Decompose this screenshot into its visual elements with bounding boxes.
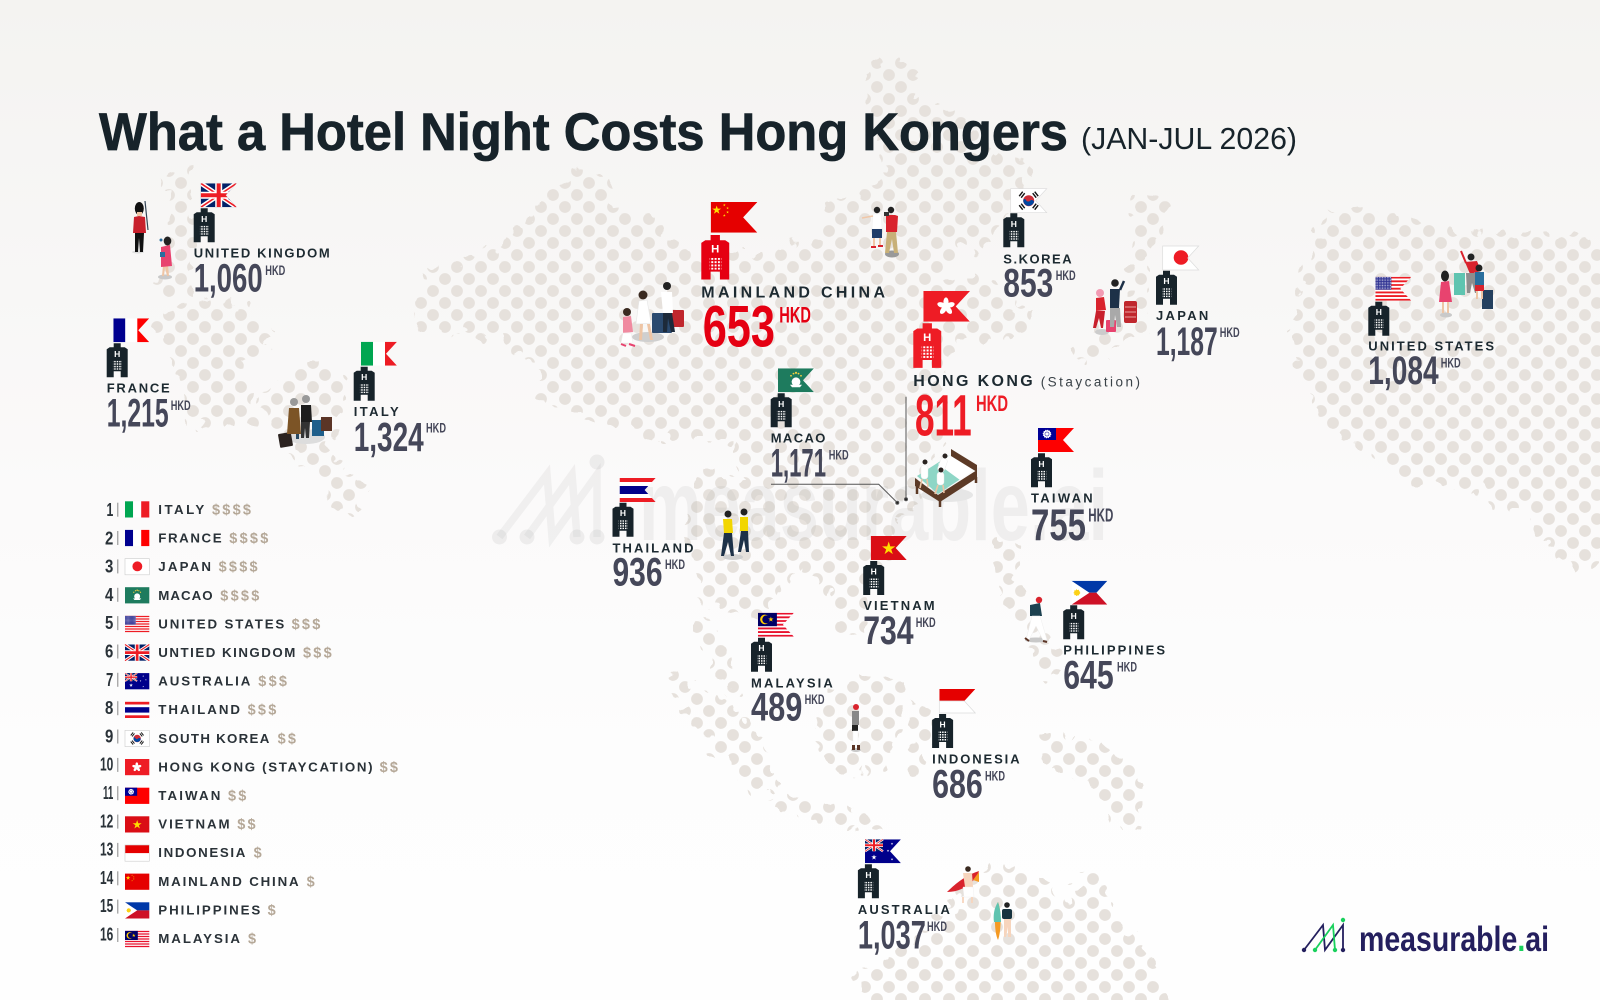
country: Malaysia [751, 613, 833, 730]
rank row 16: $ [248, 932, 256, 948]
illustration: bed with guests [915, 449, 977, 507]
flag: South Korea [1011, 189, 1047, 213]
rank row 2: 2 [105, 528, 113, 548]
rank row 4 [105, 585, 259, 605]
rank row 10: 10 [100, 755, 113, 775]
illustration: elderly couple with luggage [278, 395, 332, 448]
rank row 5: 5 [105, 613, 113, 633]
country: United States [1368, 277, 1494, 393]
unit: HKD [1056, 267, 1076, 283]
rank row 5: UNITED STATES [158, 616, 284, 631]
rank row 13 [100, 840, 262, 862]
logo wordmark: measurable.ai [1359, 920, 1549, 959]
icon: hotel: H [865, 870, 871, 880]
flag: Thailand [620, 478, 656, 502]
country: Thailand [612, 478, 694, 595]
unit: HKD [985, 768, 1005, 784]
price: 1,060 [194, 257, 263, 301]
rank row 9: 9 [105, 726, 113, 746]
price: 734 [863, 609, 914, 653]
icon: hotel: H [758, 643, 765, 653]
label: AUSTRALIA [858, 902, 951, 917]
leader lines to Macao and Hong Kong [771, 397, 908, 504]
flag: Indonesia [939, 689, 975, 713]
price: 1,037 [858, 913, 926, 957]
rank row 5 [105, 613, 320, 633]
country: Mainland China [701, 202, 885, 360]
country: Taiwan [1031, 428, 1113, 550]
watermark: measurable.ai [639, 450, 1108, 562]
label: S.KOREA [1003, 251, 1072, 266]
label: VIETNAM [863, 598, 935, 613]
flag: Vietnam [871, 536, 907, 560]
unit: HKD [927, 918, 947, 934]
rank row 4: $$$$ [220, 588, 259, 604]
label: FRANCE [107, 380, 170, 396]
unit: HKD [171, 397, 191, 413]
rank row 3 [105, 557, 258, 577]
rank row 3: $$$$ [219, 560, 258, 576]
flag: Philippines [1071, 581, 1107, 605]
subtitle: date range: (JAN-JUL 2026) [1081, 121, 1297, 156]
label: ITALY [354, 404, 399, 419]
country: France [107, 318, 191, 436]
price: 936 [612, 551, 662, 595]
rank row 9: SOUTH KOREA [158, 731, 270, 746]
unit: HKD [779, 302, 811, 327]
price: 1,084 [1368, 349, 1439, 393]
icon: hotel: H [201, 214, 207, 224]
flag: Hong Kong [923, 291, 970, 322]
unit: HKD [976, 391, 1008, 416]
flag: Japan [1163, 246, 1199, 270]
unit: HKD [1088, 506, 1113, 526]
country: Japan [1156, 246, 1240, 364]
rank row 3: 3 [105, 557, 113, 577]
icon: hotel: H [114, 349, 120, 359]
rank row 7: $$$ [258, 674, 287, 690]
unit: HKD [1220, 324, 1240, 340]
rank row 14: $ [307, 874, 315, 890]
rank row 15: $ [268, 903, 276, 919]
label: TAIWAN [1031, 491, 1093, 506]
label: HONG KONG [913, 373, 1033, 390]
flag: Macao [778, 368, 814, 392]
rank row 6: 6 [105, 642, 113, 662]
rank row 7: 7 [106, 670, 113, 690]
unit: HKD [265, 262, 285, 278]
rank row 10 [100, 755, 398, 776]
flag: Taiwan [1038, 428, 1074, 452]
rank row 15 [100, 896, 276, 919]
rank row 4: MACAO [158, 588, 213, 603]
icon: hotel: H [923, 332, 931, 344]
country: Vietnam [863, 536, 936, 653]
rank row 2: $$$$ [229, 531, 268, 547]
illustration: couple with luggage [1093, 279, 1137, 335]
icon: hotel: H [1071, 611, 1077, 621]
rank row 2: FRANCE [158, 531, 222, 546]
icon: hotel [913, 323, 941, 368]
country: Macao [771, 368, 849, 486]
label: THAILAND [612, 540, 694, 555]
icon: hotel: H [940, 720, 946, 730]
icon: hotel: H [871, 566, 877, 576]
price: 1,171 [771, 442, 826, 486]
label: MAINLAND CHINA [701, 284, 885, 301]
icon: hotel: H [620, 508, 626, 518]
icon: hotel: H [1163, 276, 1170, 286]
rank row 12: VIETNAM [158, 817, 230, 832]
label: PHILIPPINES [1063, 642, 1165, 657]
rank row 15: PHILIPPINES [158, 902, 260, 917]
rank row 16: MALAYSIA [158, 931, 240, 946]
rank row 1: ITALY [158, 502, 204, 517]
flag: UK [201, 183, 237, 207]
rank row 9: $$ [278, 731, 296, 747]
flag: Australia [865, 839, 901, 863]
price: 1,187 [1156, 320, 1218, 364]
rank row 9 [105, 726, 296, 747]
rank row 6 [105, 642, 332, 662]
price: 653 [703, 295, 775, 360]
rank row 14: 14 [100, 868, 113, 888]
unit: HKD [426, 420, 446, 436]
price: 853 [1003, 262, 1053, 306]
price: 755 [1031, 501, 1086, 550]
flag: China [711, 202, 757, 233]
rank row 14 [100, 868, 315, 890]
rank row 8: THAILAND [158, 702, 240, 717]
icon: hotel: H [711, 244, 719, 256]
illustration: hiker [1025, 597, 1047, 642]
flag: France [113, 318, 149, 342]
rank row 15: 15 [100, 896, 113, 916]
rank row 12: 12 [100, 811, 113, 831]
illustration: two backpackers [721, 508, 749, 560]
label note: staycation: (Staycation) [1041, 374, 1140, 390]
rank row 11 [103, 783, 246, 804]
country: Indonesia [932, 689, 1020, 806]
flag: United States [1375, 277, 1411, 301]
rank row 7: AUSTRALIA [158, 674, 251, 689]
rank row 8 [105, 698, 276, 719]
rank row 8: 8 [105, 698, 113, 718]
illustration: two men taking a photo [862, 207, 899, 258]
rank row 1: $$$$ [212, 502, 251, 518]
rank row 8: $$$ [248, 703, 276, 719]
price: 645 [1063, 653, 1114, 697]
icon: hotel [701, 235, 729, 280]
rank row 14: MAINLAND CHINA [158, 874, 299, 889]
logo mark [1302, 918, 1345, 952]
rank row 13: 13 [100, 840, 113, 860]
rank row 13: $ [254, 846, 262, 862]
price: 811 [915, 384, 972, 449]
rank row 12: $$ [237, 817, 256, 833]
icon: hotel: H [1011, 219, 1017, 229]
rank row 11: 11 [103, 783, 113, 803]
rank row 16 [100, 924, 256, 948]
unit: HKD [805, 691, 825, 707]
price: 686 [932, 762, 983, 806]
icon: hotel: H [1038, 459, 1045, 469]
rank row 1: 1 [106, 500, 113, 520]
rank row 6: UNTIED KINGDOM [158, 645, 295, 660]
flag: Malaysia [758, 613, 794, 637]
legend: price ranking [100, 500, 398, 948]
label: MACAO [771, 430, 825, 445]
rank row 13: INDONESIA [158, 845, 246, 860]
label: UNITED STATES [1368, 339, 1494, 354]
rank row 16: 16 [100, 924, 113, 944]
illustration: family with suitcases [1439, 251, 1493, 318]
unit: HKD [665, 556, 685, 572]
price: 1,215 [107, 392, 169, 436]
rank row 1 [106, 500, 251, 520]
rank row 3: JAPAN [158, 559, 211, 574]
unit: HKD [916, 614, 936, 630]
rank row 5: $$$ [292, 617, 320, 633]
rank row 2 [105, 528, 268, 548]
rank row 7 [106, 670, 287, 690]
rank row 6: $$$ [303, 646, 332, 662]
flag: Italy [361, 342, 397, 366]
icon: hotel: H [1376, 307, 1382, 317]
country: Philippines [1063, 581, 1165, 697]
country: Australia [858, 839, 951, 957]
rank row 11: TAIWAN [158, 788, 220, 803]
country: Hong Kong [913, 291, 1140, 449]
country: United Kingdom [194, 183, 330, 301]
illustration: solo traveller [851, 704, 861, 752]
icon: hotel: H [778, 399, 784, 409]
label: MALAYSIA [751, 675, 833, 690]
rank row 4: 4 [105, 585, 113, 605]
price: 489 [751, 686, 802, 730]
rank row 12 [100, 811, 256, 833]
unit: HKD [829, 446, 849, 462]
logo: measurable.ai [1302, 918, 1549, 959]
label: JAPAN [1156, 308, 1208, 323]
rank row 10: $$ [380, 760, 398, 776]
illustration: surfers [947, 866, 1012, 940]
icon: hotel: H [361, 372, 367, 382]
country: South Korea [1003, 189, 1076, 306]
unit: HKD [1117, 659, 1137, 675]
label: INDONESIA [932, 751, 1020, 766]
illustration: family with suitcases [621, 282, 684, 346]
rank row 11: $$ [228, 788, 246, 804]
label: UNITED KINGDOM [194, 246, 330, 261]
rank row 10: HONG KONG (STAYCATION) [158, 759, 373, 774]
watermark [492, 450, 1108, 562]
title: What a Hotel Night Costs Hong Kongers [99, 103, 1068, 162]
country: Italy [354, 342, 446, 460]
illustration: guard and tourist [132, 201, 172, 280]
unit: HKD [1441, 355, 1461, 371]
price: 1,324 [354, 414, 424, 460]
